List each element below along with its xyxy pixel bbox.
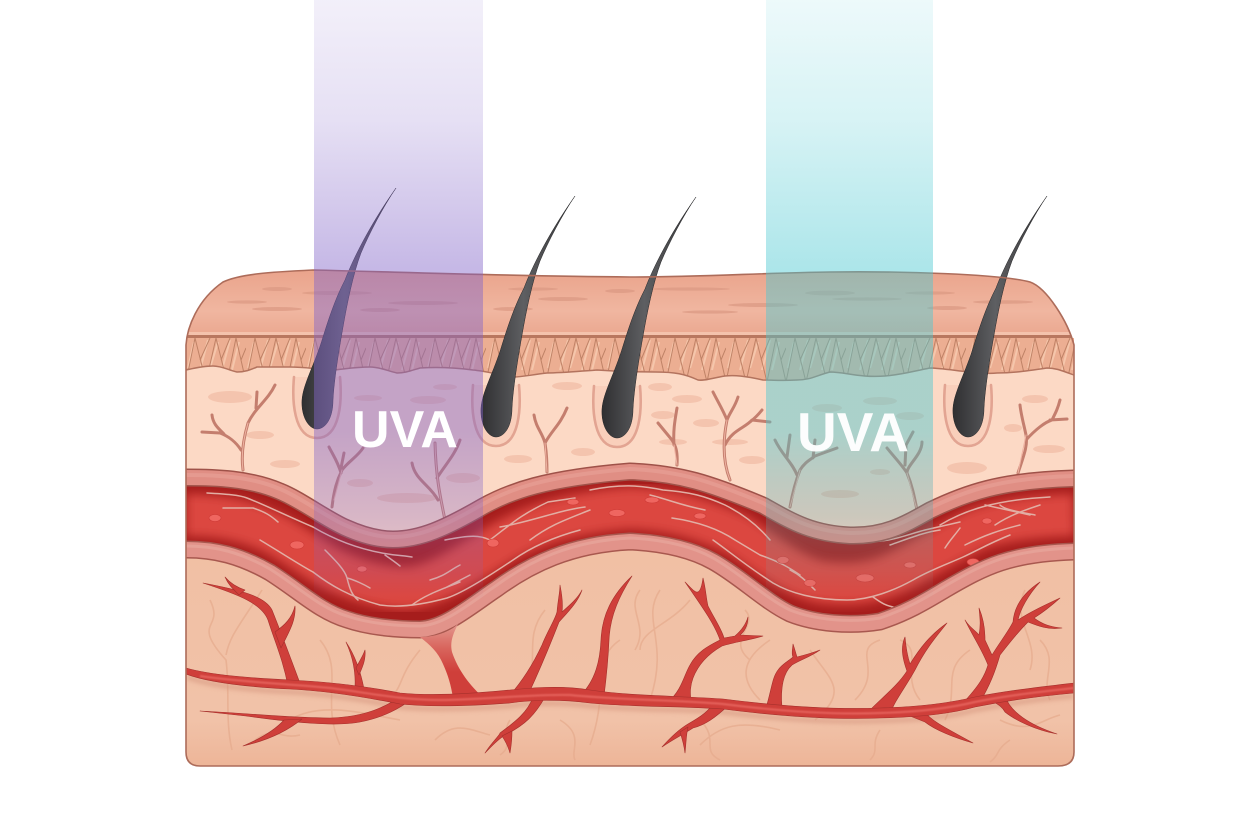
basal fibrous layer (186, 338, 1074, 383)
infographic: UVA rays penetrating a skin cross-section (185, 0, 1075, 767)
hair 2 (481, 196, 575, 437)
hairs (302, 188, 1047, 438)
dermis blotches (208, 382, 1065, 503)
label: UVA right: UVA (797, 401, 909, 463)
skin cross-section (186, 188, 1074, 766)
lumen inner veins (207, 486, 1050, 608)
hypodermis layer (186, 540, 1074, 766)
arteries network (186, 576, 1074, 753)
artery highlights (200, 676, 1074, 713)
label: UVA left: UVA (352, 401, 458, 459)
blood vessel (186, 463, 1074, 638)
dermal capillary branches (202, 385, 1067, 520)
hair 4 (953, 196, 1047, 437)
red blood cells (209, 497, 992, 586)
dermis layer (186, 366, 1074, 530)
lower vessel wall (186, 538, 1074, 630)
artery shadow (187, 677, 1073, 721)
lumen glow (186, 508, 1074, 588)
epidermis streaks (227, 287, 1033, 314)
vessel lumen (186, 480, 1074, 620)
basal layer lower boundary (186, 366, 1074, 380)
hair follicle sheaths (293, 377, 992, 447)
main artery trunk (186, 668, 1074, 718)
hair 3 (602, 197, 696, 438)
artery connector from vessel wall (420, 624, 478, 694)
artery branches (203, 583, 301, 686)
epidermis layer (186, 268, 1074, 338)
UVA beam: cyan (766, 0, 933, 600)
UVA beam: purple (314, 0, 483, 600)
hair 1 (302, 188, 396, 429)
skin outline (186, 270, 1074, 766)
upper vessel wall (186, 469, 1074, 540)
